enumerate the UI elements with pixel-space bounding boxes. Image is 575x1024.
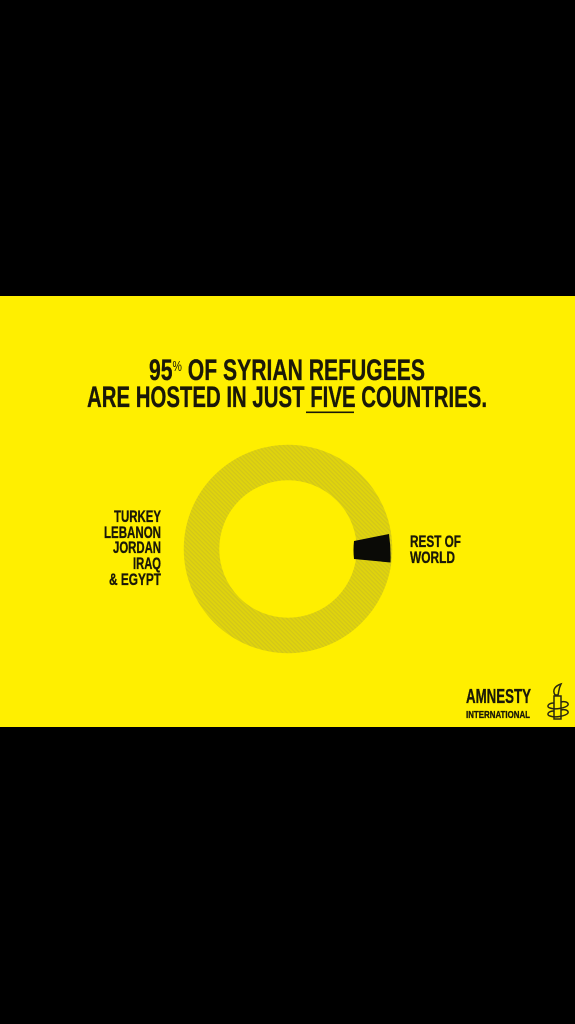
label: five host countries (104, 508, 161, 589)
logo wordmark: INTERNATIONAL (466, 709, 530, 721)
donut chart (202, 462, 391, 636)
icon: candle in barbed wire (548, 684, 568, 719)
label: rest of world: WORLD (410, 549, 455, 567)
label: five host countries: TURKEY (114, 508, 161, 526)
wedge: rest of world 5% (354, 534, 391, 562)
label: rest of world: REST OF (410, 533, 461, 551)
logo wordmark: AMNESTY (466, 686, 531, 708)
label: five host countries: IRAQ (133, 555, 161, 573)
logo wordmark (466, 686, 531, 721)
yellow panel (0, 296, 575, 727)
label: five host countries: JORDAN (113, 539, 161, 557)
label: five host countries: & EGYPT (109, 571, 161, 589)
ring: five host countries 95% (202, 462, 374, 636)
title: % (173, 358, 182, 375)
title (87, 354, 487, 414)
label: five host countries: LEBANON (104, 524, 161, 542)
title: 95 (149, 354, 182, 387)
title: OF SYRIAN REFUGEES (182, 354, 425, 387)
label: rest of world (410, 533, 461, 567)
